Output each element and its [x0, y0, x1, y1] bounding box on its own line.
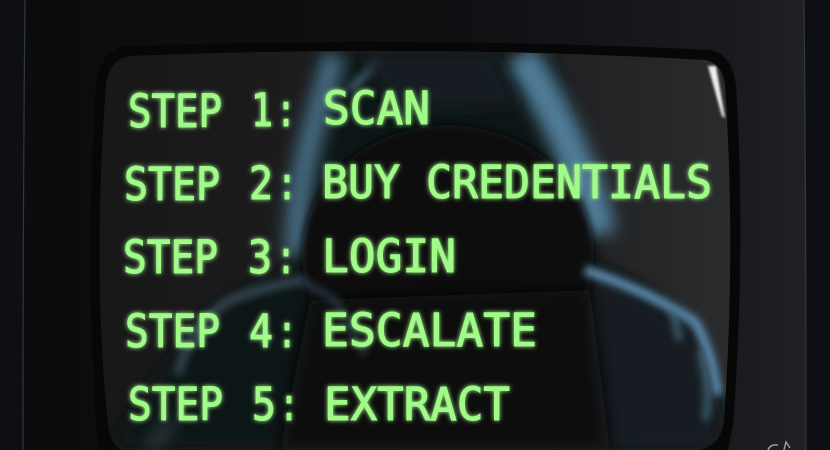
step 3: :: [276, 231, 296, 284]
step 2: 2: [249, 157, 273, 210]
step 3: STEP: [123, 231, 218, 284]
left shoulder highlight: [178, 280, 305, 375]
right shoulder highlight: [585, 270, 718, 395]
step 5: EXTRACT: [324, 378, 510, 431]
step 1: 1: [251, 84, 273, 137]
step 5: STEP: [128, 378, 223, 431]
monitor screen: [85, 35, 745, 450]
terminal text: steps: [123, 82, 712, 431]
step 1: [128, 82, 430, 138]
step 2: BUY CREDENTIALS: [322, 156, 712, 209]
step 4: STEP: [125, 305, 220, 358]
step 4: :: [277, 305, 297, 358]
step 4: ESCALATE: [322, 304, 537, 357]
step 1: STEP: [128, 85, 222, 138]
top-right glass highlight: [708, 66, 725, 118]
face opening: [297, 124, 598, 298]
step 5: 5: [252, 378, 276, 431]
hood centre: [360, 52, 520, 110]
hood highlights: [296, 55, 335, 255]
watermark fragment: [768, 442, 790, 450]
reflected hooded figure: [110, 52, 725, 450]
step 1: :: [276, 84, 296, 137]
step 4: [125, 304, 537, 358]
step 5: :: [279, 378, 299, 431]
body silhouette: [110, 52, 725, 450]
step 5: [128, 378, 510, 431]
step 3: LOGIN: [322, 230, 456, 283]
step 2: :: [277, 157, 297, 210]
step 1: SCAN: [323, 82, 430, 135]
step 4: 4: [249, 305, 273, 358]
step 2: STEP: [124, 158, 220, 211]
lower right body: [594, 284, 710, 446]
step 2: [124, 156, 712, 211]
step 3: [123, 230, 456, 284]
step 3: 3: [248, 231, 272, 284]
